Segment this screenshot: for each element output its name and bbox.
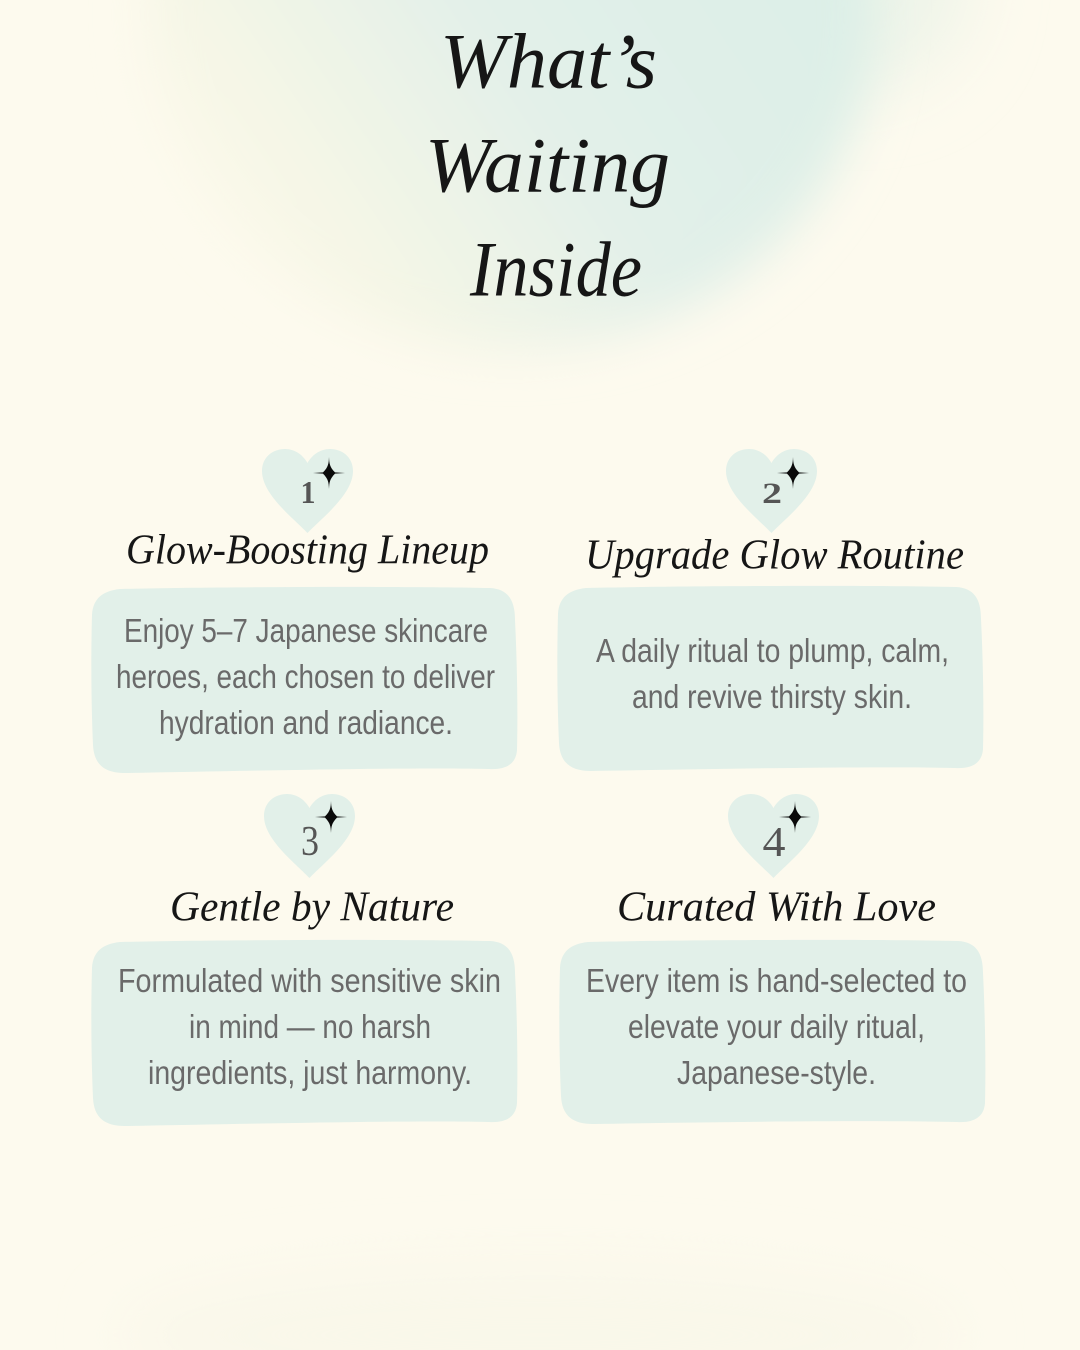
heart icon: [728, 794, 819, 878]
body text: and revive thirsty skin.: [632, 678, 912, 715]
heart icon: [264, 794, 355, 878]
panel: item 3: [91, 794, 517, 1126]
number: 2: [762, 477, 782, 510]
body text: heroes, each chosen to deliver: [116, 658, 495, 695]
number: 1: [300, 474, 316, 510]
sparkle: [779, 801, 811, 833]
top teal glow: [145, 0, 875, 350]
body text: in mind — no harsh: [189, 1008, 431, 1045]
body text: ingredients, just harmony.: [148, 1054, 472, 1091]
title: What’s: [440, 18, 657, 104]
body text: [596, 632, 949, 715]
body text: A daily ritual to plump, calm,: [596, 632, 949, 669]
body text: hydration and radiance.: [159, 704, 453, 741]
card background: [91, 940, 517, 1126]
body text: [116, 612, 495, 741]
heading: Gentle by Nature: [170, 884, 454, 930]
card background: [559, 940, 985, 1124]
card background: [91, 587, 517, 773]
panel: item 1: [91, 449, 517, 773]
sparkle: [777, 457, 809, 489]
number: 3: [301, 819, 319, 865]
heading: Upgrade Glow Routine: [585, 532, 964, 578]
heart icon: [262, 449, 353, 533]
card background: [557, 586, 983, 771]
heading: Glow-Boosting Lineup: [126, 528, 489, 574]
body text: Every item is hand-selected to: [586, 962, 967, 999]
top right soft glow: [750, 0, 970, 90]
body text: Formulated with sensitive skin: [118, 962, 501, 999]
body text: [586, 962, 967, 1091]
heading: Curated With Love: [617, 884, 936, 930]
body text: elevate your daily ritual,: [628, 1008, 925, 1045]
sparkle: [315, 801, 347, 833]
bottom glow: [120, 1265, 960, 1350]
body text: [118, 962, 501, 1091]
title: Waiting: [425, 122, 670, 208]
body text: Enjoy 5–7 Japanese skincare: [124, 612, 488, 649]
number: 4: [762, 820, 786, 866]
title: [425, 18, 670, 312]
heart icon: [726, 449, 817, 533]
title: Inside: [469, 226, 642, 312]
panel: item 4: [559, 794, 985, 1124]
sparkle: [313, 457, 345, 489]
panel: item 2: [557, 449, 983, 771]
body text: Japanese-style.: [677, 1054, 876, 1091]
